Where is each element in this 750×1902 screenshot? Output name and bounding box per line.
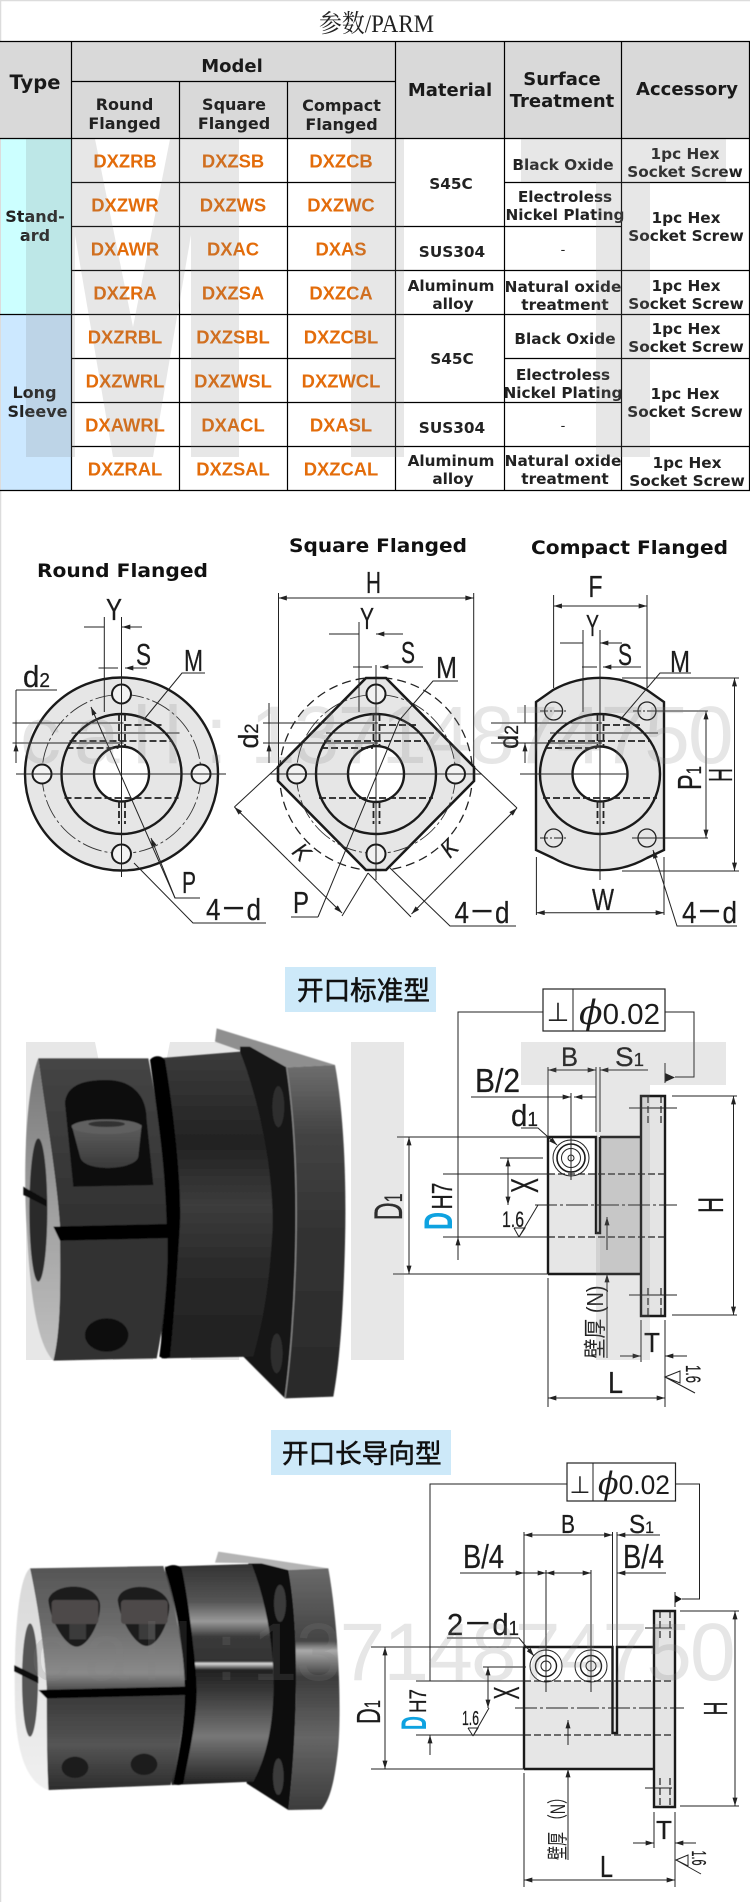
model codes: DXAWR [91, 238, 159, 260]
type labels: ard [20, 226, 50, 245]
material column: S45C [429, 175, 473, 193]
watermark: IT lower [351, 1042, 726, 1360]
type labels: Sleeve [8, 402, 68, 421]
model codes: DXZWC [307, 194, 375, 216]
label: slit long guide type: 开口长导向型 [282, 1439, 442, 1469]
drawing: slit standard dimensions [367, 989, 737, 1407]
model codes: DXACL [201, 414, 265, 436]
diagram: compact flanged: F [588, 569, 602, 604]
diagram: square flanged: Y [360, 601, 374, 636]
drawing: slit standard dimensions: X [504, 1178, 547, 1193]
table header text: Flanged [198, 114, 270, 133]
model codes: DXZSB [202, 150, 264, 172]
accessory column: Socket Screw [629, 472, 745, 490]
material column: S45C [430, 350, 474, 368]
heading: square flanged: Square Flanged [289, 535, 467, 557]
label: slit standard type [285, 967, 436, 1012]
material column: alloy [432, 470, 474, 488]
drawing: slit standard dimensions: d1 [511, 1098, 538, 1133]
material column: Aluminum [408, 452, 494, 470]
tolerance frame: ϕ0.02 [579, 993, 660, 1033]
surface treatment column: Natural oxide [505, 452, 621, 470]
table header text: Surface [523, 69, 601, 90]
title: 参数/PARM [319, 10, 434, 38]
drawing: slit standard dimensions: H7 [427, 1182, 459, 1210]
model codes: DXZRA [93, 282, 157, 304]
watermark: phone upper: : [205, 690, 228, 781]
drawing: slit long guide dimensions: D1 [350, 1700, 387, 1724]
drawing: slit standard dimensions: S1 [615, 1042, 644, 1072]
watermark: phone lower: 13714874750 [252, 1607, 734, 1698]
diagram: square flanged: K [435, 834, 465, 863]
diagram: compact flanged: S [618, 637, 632, 672]
tolerance frame [543, 989, 665, 1033]
accessory column: Socket Screw [628, 227, 744, 245]
diagram: square flanged: M [436, 650, 457, 685]
surface treatment column: Nickel Plating [506, 206, 624, 224]
surface treatment column: Electroless [518, 188, 612, 206]
type cell: standard [1, 138, 71, 314]
table header text: Treatment [510, 91, 615, 112]
surface treatment column: Black Oxide [512, 156, 614, 174]
model codes: DXZRBL [88, 326, 162, 348]
model codes: DXZWCL [302, 370, 380, 392]
type cell: long sleeve [1, 314, 71, 490]
surface treatment column: Black Oxide [514, 330, 616, 348]
drawing: slit standard dimensions: H [692, 1197, 731, 1213]
accessory column: Socket Screw [627, 163, 743, 181]
diagram: round flanged: P [182, 865, 196, 900]
drawing: slit long guide dimensions: L [600, 1849, 613, 1884]
diagram: compact flanged: M [670, 644, 690, 679]
model codes: DXZWSL [194, 370, 272, 392]
table header text: Flanged [305, 115, 378, 134]
model codes: DXZWRL [86, 370, 164, 392]
type labels: Stand- [5, 207, 65, 226]
drawing: slit long guide dimensions: 1.6 [687, 1850, 709, 1866]
accessory column: 1pc Hex [650, 385, 720, 403]
label: slit long guide type [271, 1430, 451, 1475]
type labels: Long [12, 383, 57, 402]
table header text [10, 56, 738, 134]
model codes: DXZSAL [196, 458, 270, 480]
drawing: slit standard dimensions: B/2 [475, 1062, 520, 1099]
parameter table [0, 41, 750, 491]
surface treatment column [504, 156, 624, 488]
surface treatment column: Natural oxide [505, 278, 621, 296]
drawing: slit long guide dimensions: T [656, 1815, 672, 1845]
material column: SUS304 [419, 419, 485, 437]
drawing: slit standard dimensions: 1.6 [681, 1365, 704, 1383]
drawing: slit standard dimensions: D1 [367, 1193, 411, 1221]
diagram: compact flanged: d2 [493, 725, 524, 749]
accessory column: 1pc Hex [651, 320, 721, 338]
accessory column: 1pc Hex [651, 277, 721, 295]
model codes: DXAC [207, 238, 259, 260]
diagram: round flanged [12, 592, 266, 927]
diagram: round flanged: S [136, 637, 151, 672]
drawing: slit standard dimensions: 1.6 [502, 1207, 524, 1232]
watermark: phone lower: call [30, 1607, 205, 1698]
model codes: DXZRAL [88, 458, 162, 480]
drawing: slit long guide dimensions: H7 [405, 1689, 432, 1713]
diagram: round flanged: Y [106, 592, 122, 627]
drawing: slit standard dimensions: B [561, 1042, 578, 1072]
drawing: slit long guide dimensions: 1.6 [462, 1708, 479, 1730]
heading: compact flanged: Compact Flanged [531, 537, 728, 559]
diagram: compact flanged: Y [586, 608, 599, 643]
drawing: slit long guide dimensions: 2－d1 [447, 1607, 519, 1642]
model codes: DXZSBL [196, 326, 270, 348]
table header text: Material [408, 80, 492, 101]
tolerance frame: ⊥ [547, 998, 569, 1028]
diagram: compact flanged: H [702, 768, 739, 782]
model codes: DXZSA [202, 282, 264, 304]
surface treatment column: treatment [521, 296, 609, 314]
model codes: DXZCAL [304, 458, 378, 480]
diagram: square flanged: S [401, 635, 415, 670]
diagram: round flanged: 4－d [206, 892, 261, 927]
watermark: M lower [26, 1042, 239, 1360]
accessory column [627, 145, 745, 490]
model codes: DXZCA [309, 282, 373, 304]
diagram: round flanged: d2 [23, 659, 50, 694]
surface treatment column: Nickel Plating [504, 384, 622, 402]
accessory column: 1pc Hex [650, 145, 720, 163]
diagram: compact flanged: P1 [671, 766, 708, 790]
watermark: MIT upper [26, 139, 726, 457]
diagram: square flanged [233, 565, 517, 930]
accessory column: Socket Screw [628, 295, 744, 313]
model codes: DXZCB [309, 150, 373, 172]
diagram: square flanged: H [366, 565, 381, 600]
tolerance frame: ⊥ [570, 1471, 590, 1499]
watermark: phone upper: 13714874750 [250, 690, 732, 781]
type labels [5, 207, 68, 421]
surface treatment column: - [561, 419, 566, 434]
accessory column: 1pc Hex [652, 454, 722, 472]
diagram: square flanged: d2 [233, 724, 264, 748]
drawing: slit long guide dimensions: B/4 [623, 1538, 664, 1575]
tolerance frame: ϕ0.02 [598, 1466, 670, 1502]
accessory column: Socket Screw [628, 338, 744, 356]
surface treatment column: Electroless [516, 366, 610, 384]
model codes: DXZRB [93, 150, 157, 172]
diagram: square flanged: P [293, 885, 309, 920]
drawing: slit standard dimensions: T [644, 1327, 660, 1358]
drawing: slit long guide dimensions [350, 1463, 739, 1887]
model codes: DXZCBL [304, 326, 378, 348]
drawing: slit long guide dimensions: B/4 [463, 1538, 504, 1575]
drawing: slit long guide dimensions: B [561, 1509, 575, 1539]
tolerance frame [567, 1463, 676, 1502]
drawing: slit long guide dimensions: D [395, 1716, 434, 1730]
material column: Aluminum [408, 277, 494, 295]
model codes: DXZWS [200, 194, 266, 216]
table header text: Flanged [88, 114, 161, 133]
diagram: square flanged: K [287, 838, 316, 868]
table header text: Square [202, 95, 266, 114]
material column: alloy [432, 295, 474, 313]
drawing: slit standard dimensions: 壁厚 (N) [582, 1286, 608, 1358]
drawing: slit standard dimensions: D [417, 1212, 461, 1230]
watermark: phone lower: : [215, 1607, 238, 1698]
diagram: round flanged: M [184, 643, 203, 678]
table header text: Type [10, 71, 60, 94]
photo: slit standard coupling [23, 1028, 345, 1398]
table header text: Round [96, 95, 153, 114]
drawing: slit standard dimensions: L [608, 1365, 623, 1400]
heading: round flanged: Round Flanged [37, 560, 208, 582]
model codes: DXAS [315, 238, 367, 260]
model codes: DXZWR [91, 194, 159, 216]
drawing: slit long guide dimensions: 壁厚 （N） [547, 1790, 570, 1860]
model codes [85, 150, 380, 480]
table header text: Model [201, 56, 263, 77]
label: slit standard type: 开口标准型 [297, 976, 430, 1006]
model codes: DXAWRL [85, 414, 165, 436]
model codes: DXASL [310, 414, 372, 436]
material column: SUS304 [419, 243, 485, 261]
watermark: phone upper: call [20, 690, 195, 781]
diagram: compact flanged: 4－d [682, 895, 737, 930]
table header text: Compact [302, 96, 381, 115]
material column [408, 175, 494, 488]
surface treatment column: - [561, 243, 566, 258]
diagram: compact flanged: W [592, 882, 615, 917]
accessory column: 1pc Hex [651, 209, 721, 227]
table grid [0, 41, 750, 491]
table header text: Accessory [636, 79, 738, 100]
diagram: compact flanged [491, 569, 739, 930]
photo: slit long guide coupling [14, 1552, 340, 1810]
drawing: slit long guide dimensions: H [697, 1702, 734, 1715]
table header background [0, 41, 750, 138]
drawing: slit long guide dimensions: X [486, 1686, 527, 1700]
accessory column: Socket Screw [627, 403, 743, 421]
diagram: square flanged: 4－d [454, 895, 510, 930]
drawing: slit long guide dimensions: S1 [629, 1509, 654, 1539]
surface treatment column: treatment [521, 470, 609, 488]
